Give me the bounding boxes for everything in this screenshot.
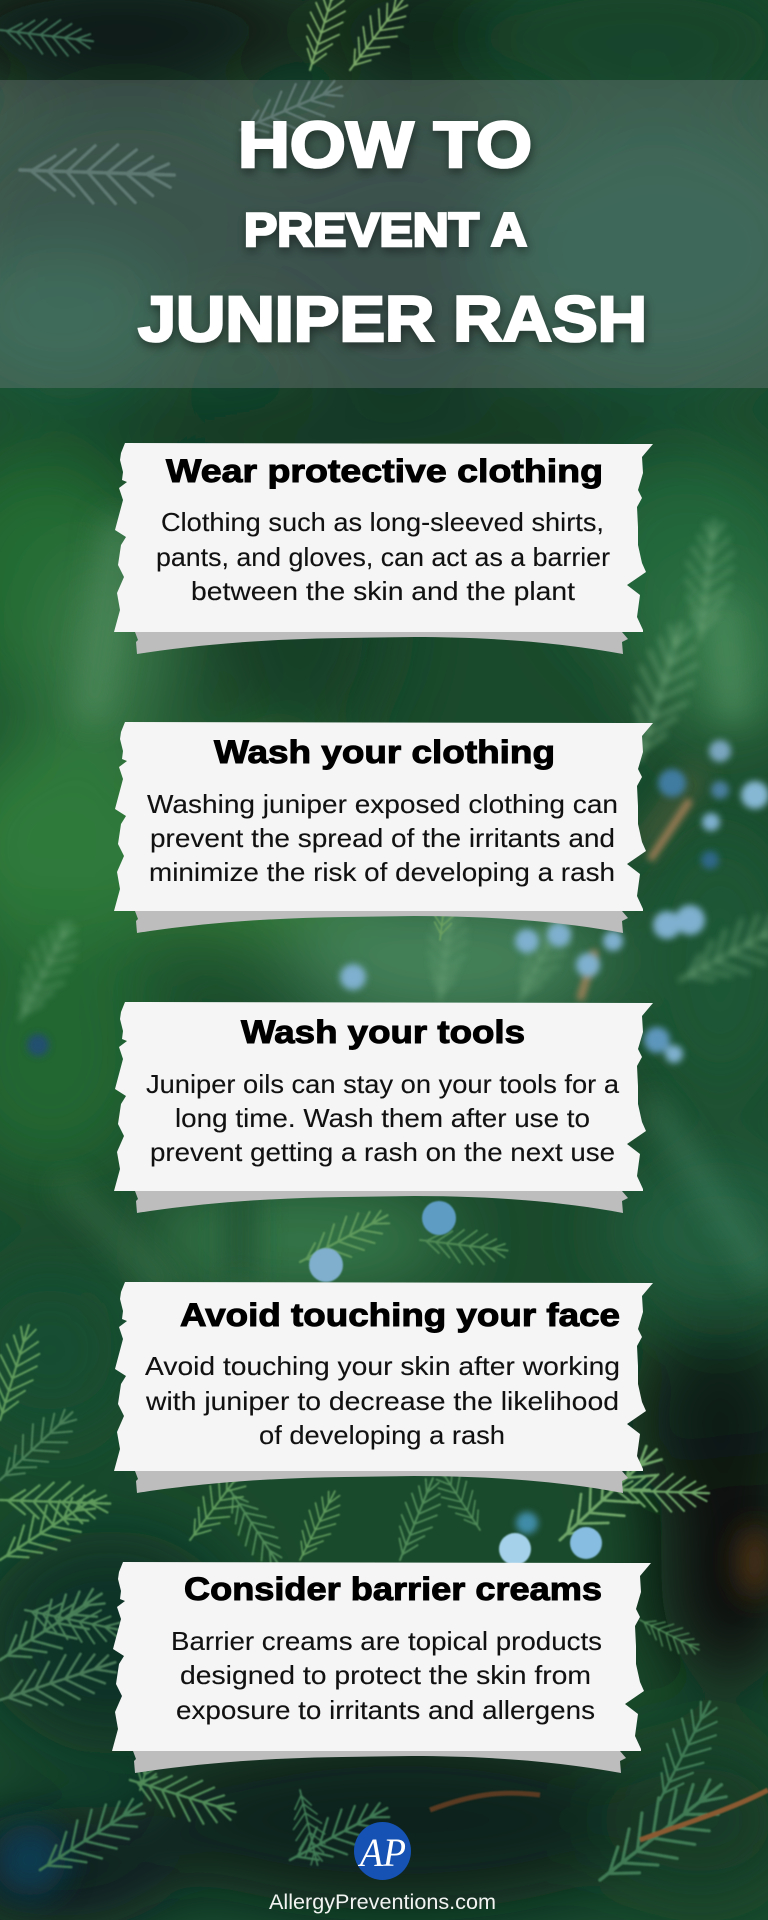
panel: wash your clothing: Wash your clothing bbox=[214, 734, 555, 770]
title bbox=[138, 108, 647, 355]
panel: wash your clothing: minimize the risk of developing a rash bbox=[149, 857, 615, 887]
panel: consider barrier creams bbox=[112, 1562, 651, 1773]
panel: wash your tools bbox=[114, 1002, 653, 1213]
panel: wear protective clothing: pants, and gloves, can act as a barrier bbox=[156, 542, 610, 572]
title band bbox=[0, 80, 768, 388]
panel: wash your tools: Juniper oils can stay on your tools for a bbox=[146, 1069, 620, 1099]
logo: AP circle: AP bbox=[357, 1830, 406, 1875]
panel: wash your clothing bbox=[114, 722, 653, 933]
juniper berries bbox=[27, 740, 768, 1565]
panel: avoid touching your face bbox=[114, 1282, 653, 1493]
panel: wash your clothing: prevent the spread of the irritants and bbox=[150, 823, 615, 853]
panel: consider barrier creams: Barrier creams are topical products bbox=[171, 1626, 602, 1656]
panel: wash your tools: Wash your tools bbox=[241, 1014, 525, 1050]
panel: wear protective clothing bbox=[114, 443, 653, 654]
panel: consider barrier creams: Consider barrier creams bbox=[184, 1571, 602, 1607]
panel: consider barrier creams: designed to protect the skin from bbox=[180, 1660, 591, 1690]
panel: wash your tools: prevent getting a rash on the next use bbox=[150, 1137, 615, 1167]
title: HOW TO bbox=[238, 108, 532, 181]
panel: wash your clothing: Washing juniper exposed clothing can bbox=[147, 789, 618, 819]
panel: wear protective clothing: between the skin and the plant bbox=[191, 576, 576, 606]
panel: avoid touching your face: Avoid touching your skin after working bbox=[145, 1351, 620, 1381]
panel: avoid touching your face: of developing a rash bbox=[259, 1420, 505, 1450]
website address: AllergyPreventions.com bbox=[269, 1891, 496, 1914]
logo: AP circle bbox=[354, 1822, 411, 1880]
panel: wear protective clothing: Wear protective clothing bbox=[166, 453, 603, 489]
title: PREVENT A bbox=[244, 203, 527, 256]
panel: wash your tools: long time. Wash them after use to bbox=[175, 1103, 590, 1133]
panel: avoid touching your face: with juniper to decrease the likelihood bbox=[145, 1386, 619, 1416]
panel: consider barrier creams: exposure to irritants and allergens bbox=[176, 1695, 595, 1725]
title: JUNIPER RASH bbox=[138, 283, 647, 355]
panel: wear protective clothing: Clothing such as long-sleeved shirts, bbox=[161, 507, 604, 537]
panel: avoid touching your face: Avoid touching your face bbox=[180, 1297, 620, 1333]
